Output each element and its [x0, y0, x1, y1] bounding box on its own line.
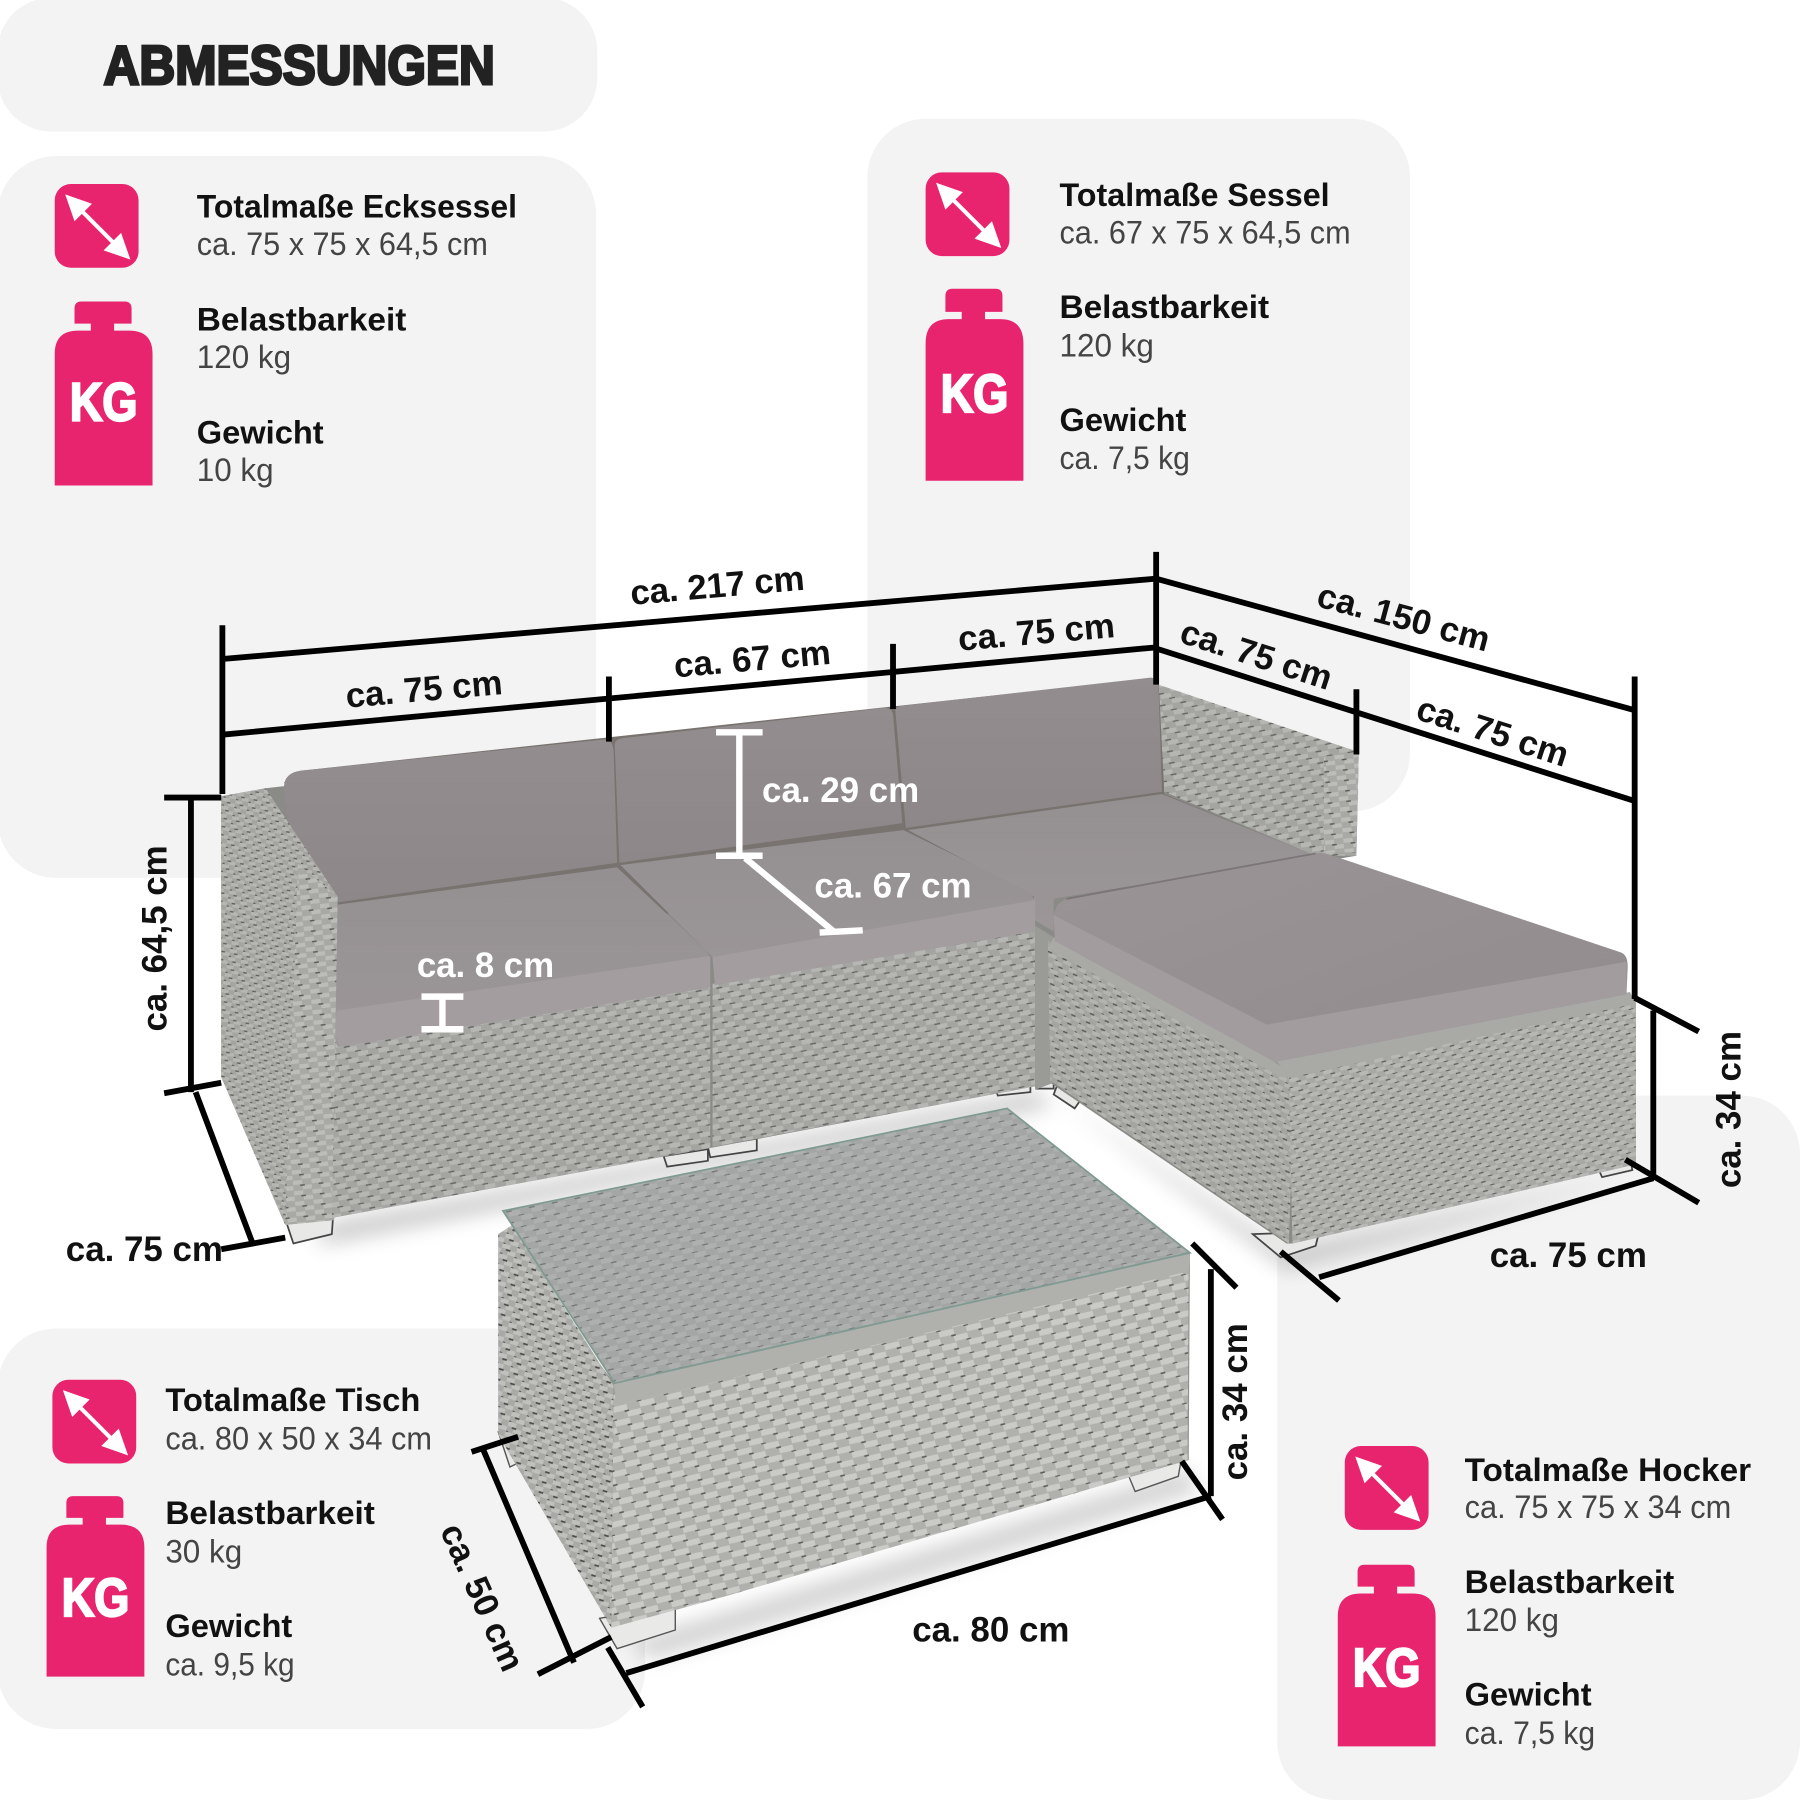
label: sofa height: ca. 64,5 cm	[135, 845, 174, 1032]
icon: dimensions arrow	[55, 184, 139, 268]
label: total width: ca. 217 cm	[629, 559, 806, 613]
icon: dimensions arrow	[926, 172, 1009, 256]
label: stool width: ca. 75 cm	[1490, 1236, 1647, 1275]
info block: table	[47, 1380, 432, 1682]
icon: weight: KG	[1353, 1639, 1420, 1698]
label: table depth: ca. 50 cm	[432, 1518, 532, 1677]
sofa left armrest side	[221, 788, 338, 1225]
seat cushion right	[908, 794, 1316, 931]
stool wicker front face	[1289, 999, 1636, 1243]
text: stool specs: Belastbarkeit	[1465, 1564, 1675, 1600]
photo: rattan sofa set	[221, 678, 1642, 1269]
text: stool specs: Gewicht	[1465, 1677, 1592, 1713]
icon: weight	[55, 302, 153, 486]
text: armchair specs: Belastbarkeit	[1060, 289, 1269, 325]
icon: weight: KG	[70, 373, 137, 432]
back cushion middle	[615, 708, 902, 863]
text: armchair specs	[1060, 177, 1351, 476]
label: table width: ca. 80 cm	[912, 1611, 1069, 1650]
label: left section width: ca. 75 cm	[344, 663, 504, 716]
text: corner chair specs	[197, 189, 517, 488]
info block: armchair	[926, 172, 1351, 481]
text: corner chair specs: ca. 75 x 75 x 64,5 cm	[197, 226, 488, 262]
sofa left armrest front	[285, 864, 338, 1225]
title: ABMESSUNGEN	[104, 34, 495, 96]
text: armchair specs: ca. 7,5 kg	[1060, 440, 1190, 476]
seat cushion middle	[621, 830, 1035, 985]
back cushion right	[895, 678, 1162, 828]
white measurement: cushion height	[716, 732, 763, 856]
right armrest	[1158, 685, 1359, 856]
dimension lines	[164, 552, 1699, 1707]
white measurement: seat depth	[745, 858, 863, 933]
label: stool height: ca. 34 cm	[1710, 1031, 1749, 1188]
icon: weight	[47, 1496, 144, 1677]
text: table specs: ca. 80 x 50 x 34 cm	[165, 1421, 432, 1457]
text: armchair specs: Gewicht	[1060, 402, 1187, 438]
white measurement: seat thickness	[421, 997, 463, 1029]
label: middle section width: ca. 67 cm	[672, 633, 832, 685]
label: right section width: ca. 75 cm	[956, 606, 1116, 659]
text: table specs: ca. 9,5 kg	[165, 1646, 295, 1682]
panel: armchair background	[867, 119, 1410, 812]
sofa feet	[286, 1077, 1632, 1257]
base left	[332, 984, 710, 1218]
text: table specs: Gewicht	[165, 1608, 293, 1644]
text: corner chair specs: Totalmaße Ecksessel	[197, 189, 517, 225]
icon: dimensions arrow	[1345, 1446, 1429, 1530]
table left side	[498, 1225, 614, 1628]
table front	[611, 1263, 1189, 1628]
label: table height: ca. 34 cm	[1216, 1323, 1255, 1480]
stool wicker left face	[1048, 941, 1295, 1243]
panel: corner chair background	[0, 156, 596, 878]
info block: stool	[1338, 1446, 1751, 1751]
label: stool depth: ca. 75 cm	[1412, 689, 1573, 775]
table feet	[498, 1432, 1183, 1649]
icon: weight	[926, 289, 1023, 481]
text: corner chair specs: 120 kg	[197, 339, 291, 375]
table glass top	[503, 1108, 1190, 1383]
text: table specs: Belastbarkeit	[165, 1495, 375, 1531]
text: corner chair specs: Belastbarkeit	[197, 302, 407, 338]
text: corner chair specs: Gewicht	[197, 415, 324, 451]
text: stool specs: ca. 7,5 kg	[1465, 1715, 1595, 1751]
text: table specs: 30 kg	[165, 1533, 242, 1569]
label: total depth: ca. 150 cm	[1313, 576, 1494, 659]
text: stool specs	[1465, 1452, 1751, 1751]
icon: weight: KG	[62, 1569, 129, 1628]
icon: dimensions arrow	[52, 1380, 136, 1464]
text: stool specs: ca. 75 x 75 x 34 cm	[1465, 1489, 1731, 1525]
icon: weight: KG	[941, 365, 1008, 424]
text: corner chair specs: 10 kg	[197, 452, 274, 488]
text: armchair specs: 120 kg	[1060, 327, 1154, 363]
icon: weight	[1338, 1565, 1436, 1746]
text: stool specs: Totalmaße Hocker	[1465, 1452, 1751, 1488]
text: table specs: Totalmaße Tisch	[165, 1382, 420, 1418]
text: stool specs: 120 kg	[1465, 1602, 1559, 1638]
label: cushion height: ca. 29 cm	[762, 771, 919, 810]
panel: stool background	[1277, 1096, 1800, 1800]
text: table specs	[165, 1382, 432, 1682]
text: armchair specs: ca. 67 x 75 x 64,5 cm	[1060, 214, 1351, 250]
label: seat thickness: ca. 8 cm	[417, 946, 554, 985]
panel: title background	[0, 0, 597, 132]
photo: rattan coffee table	[498, 1108, 1199, 1659]
seat cushion left	[335, 867, 710, 1047]
info block: corner chair	[55, 184, 517, 488]
label: sofa side depth: ca. 75 cm	[66, 1230, 223, 1269]
label: chair depth: ca. 75 cm	[1176, 612, 1337, 698]
base middle	[713, 931, 1035, 1147]
back cushion left	[284, 739, 617, 902]
stool cushion	[1054, 853, 1628, 1062]
text: armchair specs: Totalmaße Sessel	[1060, 177, 1330, 213]
panel: table background	[0, 1328, 645, 1729]
label: seat depth: ca. 67 cm	[814, 867, 972, 906]
